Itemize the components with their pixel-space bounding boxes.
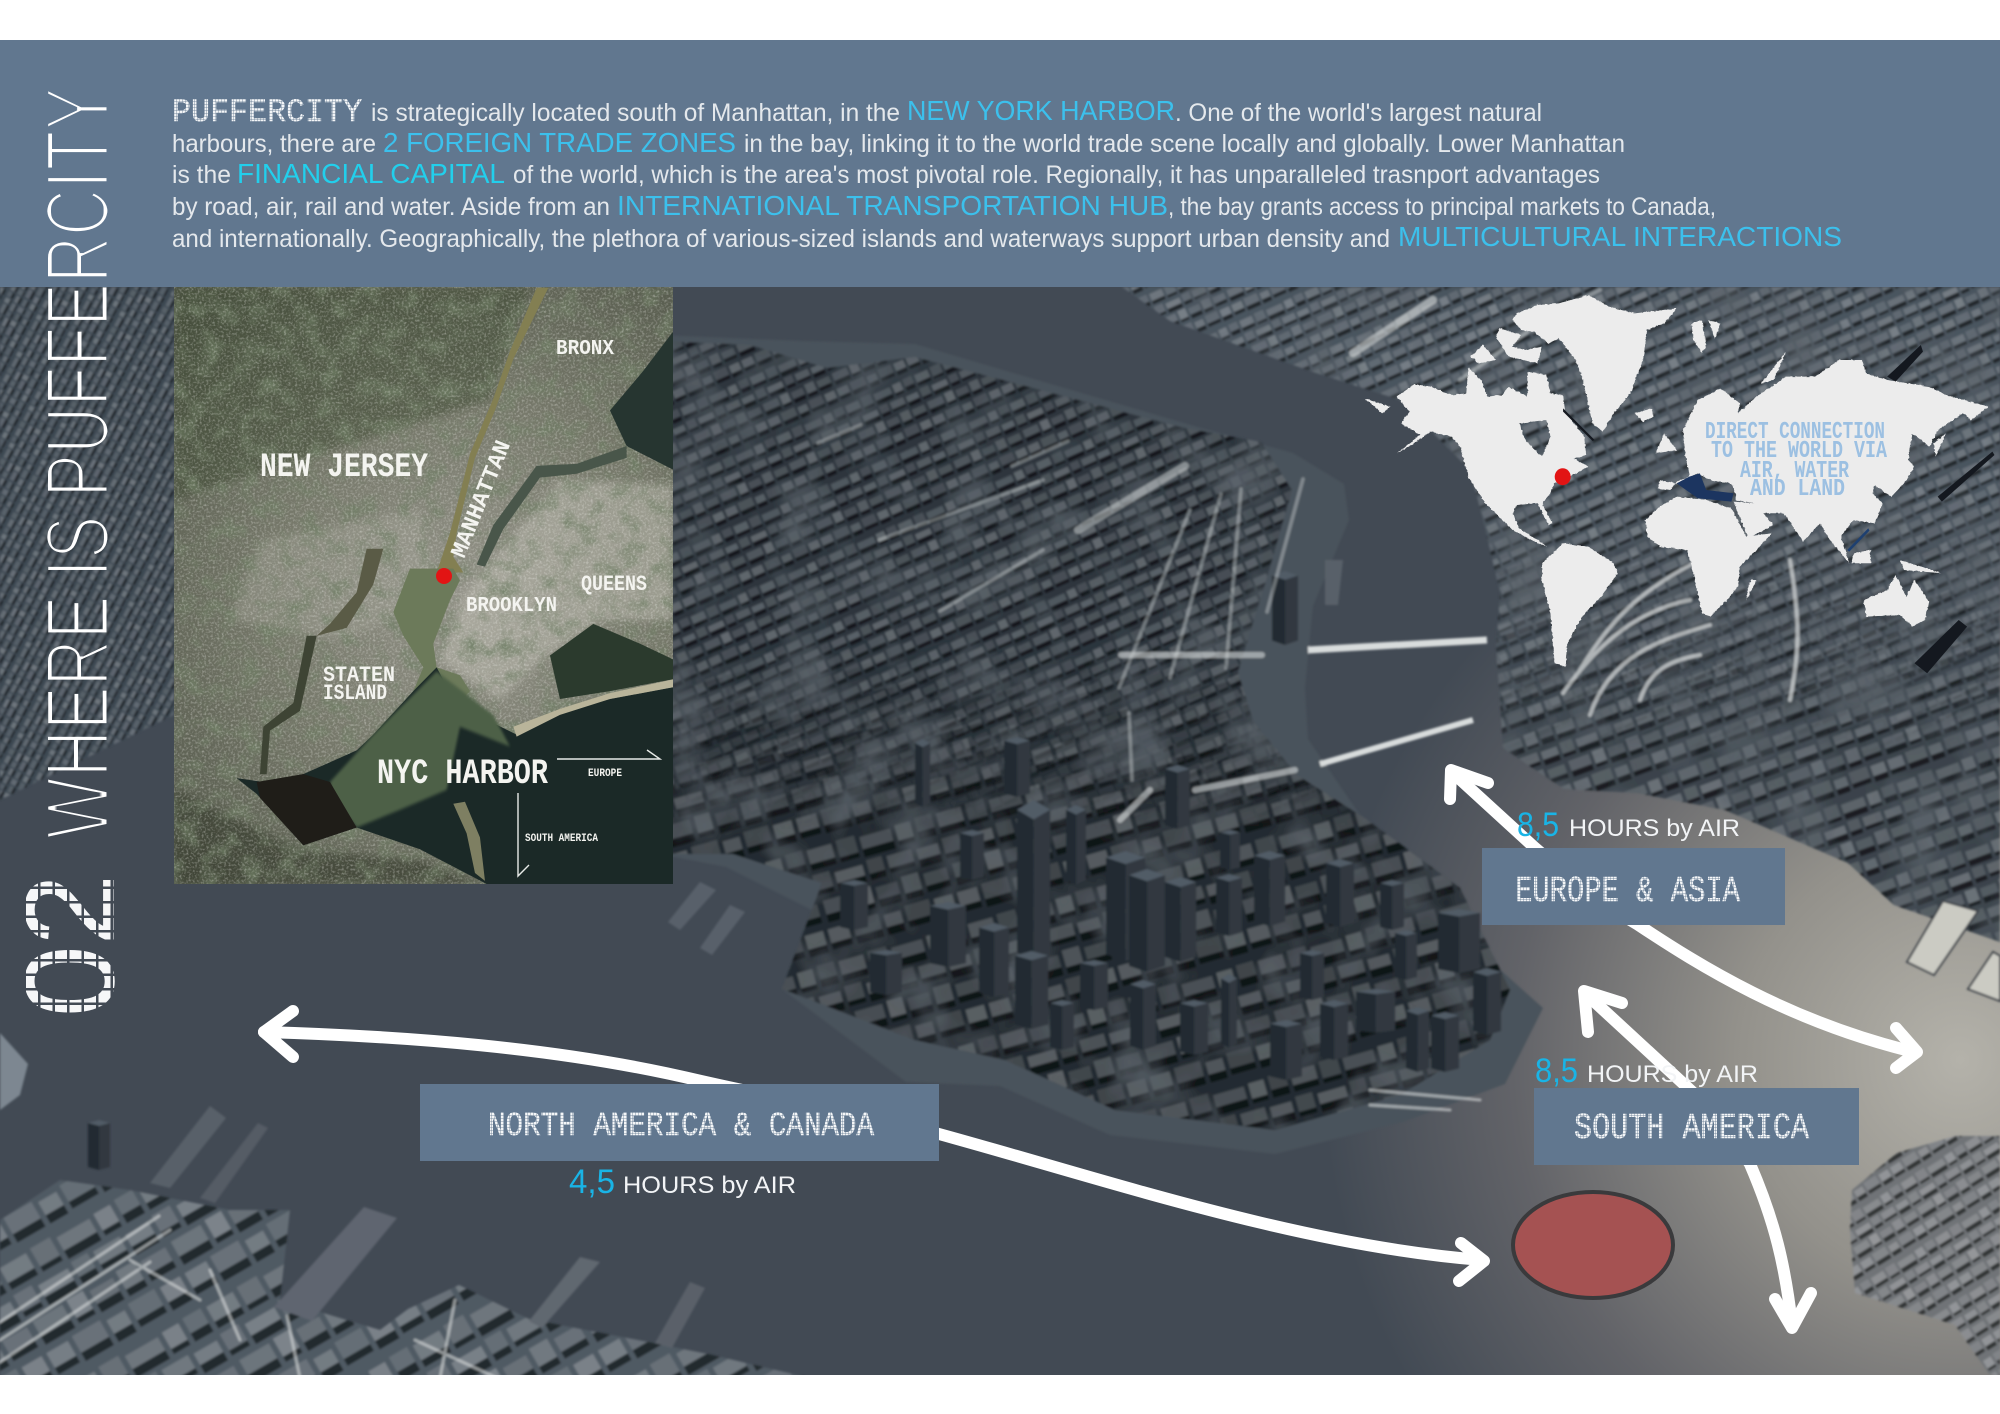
Sandy Hook [453,802,485,881]
Japan [1933,433,1946,457]
label: Europe and Asia: EUROPE & ASIA [1515,871,1740,912]
map place labels [260,338,647,845]
intro paragraph [172,94,1842,253]
red location marker [436,568,452,584]
South America [1542,543,1618,667]
map place labels: STATEN [323,663,395,688]
Africa [1645,497,1771,617]
Arabia [1734,502,1774,538]
Great Britain [1656,433,1677,453]
travel time: South America: HOURS by AIR [1587,1061,1758,1088]
barrier beach [513,679,673,737]
land base [174,287,673,884]
upper bay [373,569,493,774]
urban New Jersey [234,513,424,638]
intro paragraph: PUFFERCITY [172,94,362,131]
dark map artefacts [1563,345,1994,673]
left edge landmass [0,1033,28,1110]
world map caption: AND LAND [1750,476,1845,503]
world map caption [1705,419,1887,503]
map place labels: SOUTH AMERICA [525,833,598,845]
world map caption: DIRECT CONNECTION [1705,419,1885,446]
destination marker [1513,1192,1673,1298]
green texture [174,287,673,884]
dark vegetation in the northwest [174,287,530,500]
background: 3D city model of the harbor [0,287,2000,1378]
Brooklyn and Queens blocks [1123,287,2000,745]
intro paragraph: NEW YORK HARBOR [907,95,1175,126]
arrow: South America route [1584,991,1811,1328]
Long Island Sound [610,331,673,470]
dark inner bay [257,774,357,845]
travel time: Europe and Asia: HOURS by AIR [1569,815,1740,842]
intro paragraph: is strategically located south of Manhattan, in the [371,99,900,127]
sediment plume [330,671,510,827]
intro paragraph: and internationally. Geographically, the plethora of various-sized islands and waterways support urban density and [172,225,1390,253]
North America [1397,367,1588,547]
label: South America [1534,1088,1859,1165]
Hudson river [437,288,548,573]
intro paragraph: in the bay, linking it to the world trade scene locally and globally. Lower Manhattan [744,130,1625,158]
inland creek [260,636,317,774]
Aleutians [1365,398,1391,413]
intro paragraph: of the world, which is the area's most pivotal role. Regionally, it has unparalleled trasnport advantages [513,161,1600,189]
Jamaica Bay [550,624,673,699]
intro paragraph: . One of the world's largest natural [1175,99,1542,127]
ocean [237,667,673,884]
travel time: Europe and Asia [1517,806,1740,844]
Svalbard [1691,320,1706,353]
bottom-left city blocks [0,1180,810,1378]
Eurasia [1658,360,1988,563]
downtown towers [840,571,1501,1080]
vertical title: 02 [0,874,140,1017]
travel time: Europe and Asia: 8,5 [1517,806,1559,844]
label: Europe and Asia [1482,848,1785,925]
bottom-right island [1850,1136,2000,1378]
intro paragraph: by road, air, rail and water. Aside from an [172,193,610,221]
Newark Bay [317,549,383,636]
intro paragraph: 2 FOREIGN TRADE ZONES [383,127,736,158]
travel time: South America [1535,1052,1758,1090]
direction arrows [518,750,660,876]
Madagascar [1746,580,1757,600]
midtown blocks [660,341,1510,1130]
travel time: North America and Canada [569,1163,796,1201]
Indonesia [1851,550,1870,563]
travel time: North America and Canada: HOURS by AIR [623,1172,796,1199]
travel time: South America: 8,5 [1535,1052,1578,1090]
map place labels: BRONX [556,338,614,361]
Australia [1864,575,1929,627]
piers [88,560,2000,1348]
Mediterranean sea [1677,473,1734,502]
map place labels: NEW JERSEY [260,449,428,487]
intro paragraph: is the [172,161,231,189]
map place labels: ISLAND [323,681,387,706]
intro paragraph: MULTICULTURAL INTERACTIONS [1398,221,1842,252]
label: North America and Canada: NORTH AMERICA & CANADA [488,1108,875,1146]
label: North America and Canada [420,1084,939,1161]
vertical title [0,87,140,1017]
panel: satellite map of the NYC harbor [174,287,673,884]
world map caption: AIR, WATER [1740,458,1849,485]
map place labels: QUEENS [581,572,647,597]
intro paragraph: harbours, there are [172,130,376,158]
map place labels: EUROPE [588,768,622,780]
map place labels: BROOKLYN [466,595,557,618]
intro paragraph: INTERNATIONAL TRANSPORTATION HUB [617,190,1168,221]
intro paragraph: , the bay grants access to principal markets to Canada, [1168,193,1716,221]
arrow: North America and Canada route [264,1011,1484,1281]
arrow: Europe and Asia route [1450,770,1917,1068]
East River [477,446,627,567]
downtown blocks [673,658,1510,1130]
avenues and bridges [0,290,1798,1378]
tonal variation across the city [660,287,2000,1167]
map place labels: MANHATTAN [446,437,517,562]
Novaya Zemlya [1761,352,1786,383]
dark vegetation in the southwest [174,790,480,884]
urban texture [174,287,673,884]
label: South America: SOUTH AMERICA [1574,1108,1809,1149]
travel time: North America and Canada: 4,5 [569,1163,615,1201]
left city strip [0,287,174,800]
Manhattan shore [660,335,1543,1154]
Greenland [1513,295,1677,432]
map place labels: NYC HARBOR [377,754,548,794]
intro paragraph: FINANCIAL CAPITAL [237,158,505,189]
red location marker [1555,468,1571,485]
world map [1365,295,1994,673]
header band [0,40,2000,287]
Arctic islands [1496,328,1542,363]
light urban Brooklyn and Queens [440,480,673,700]
large blocks south of Brooklyn [1483,520,2000,942]
world map caption: TO THE WORLD VIA [1711,438,1887,465]
Iceland [1635,408,1654,422]
